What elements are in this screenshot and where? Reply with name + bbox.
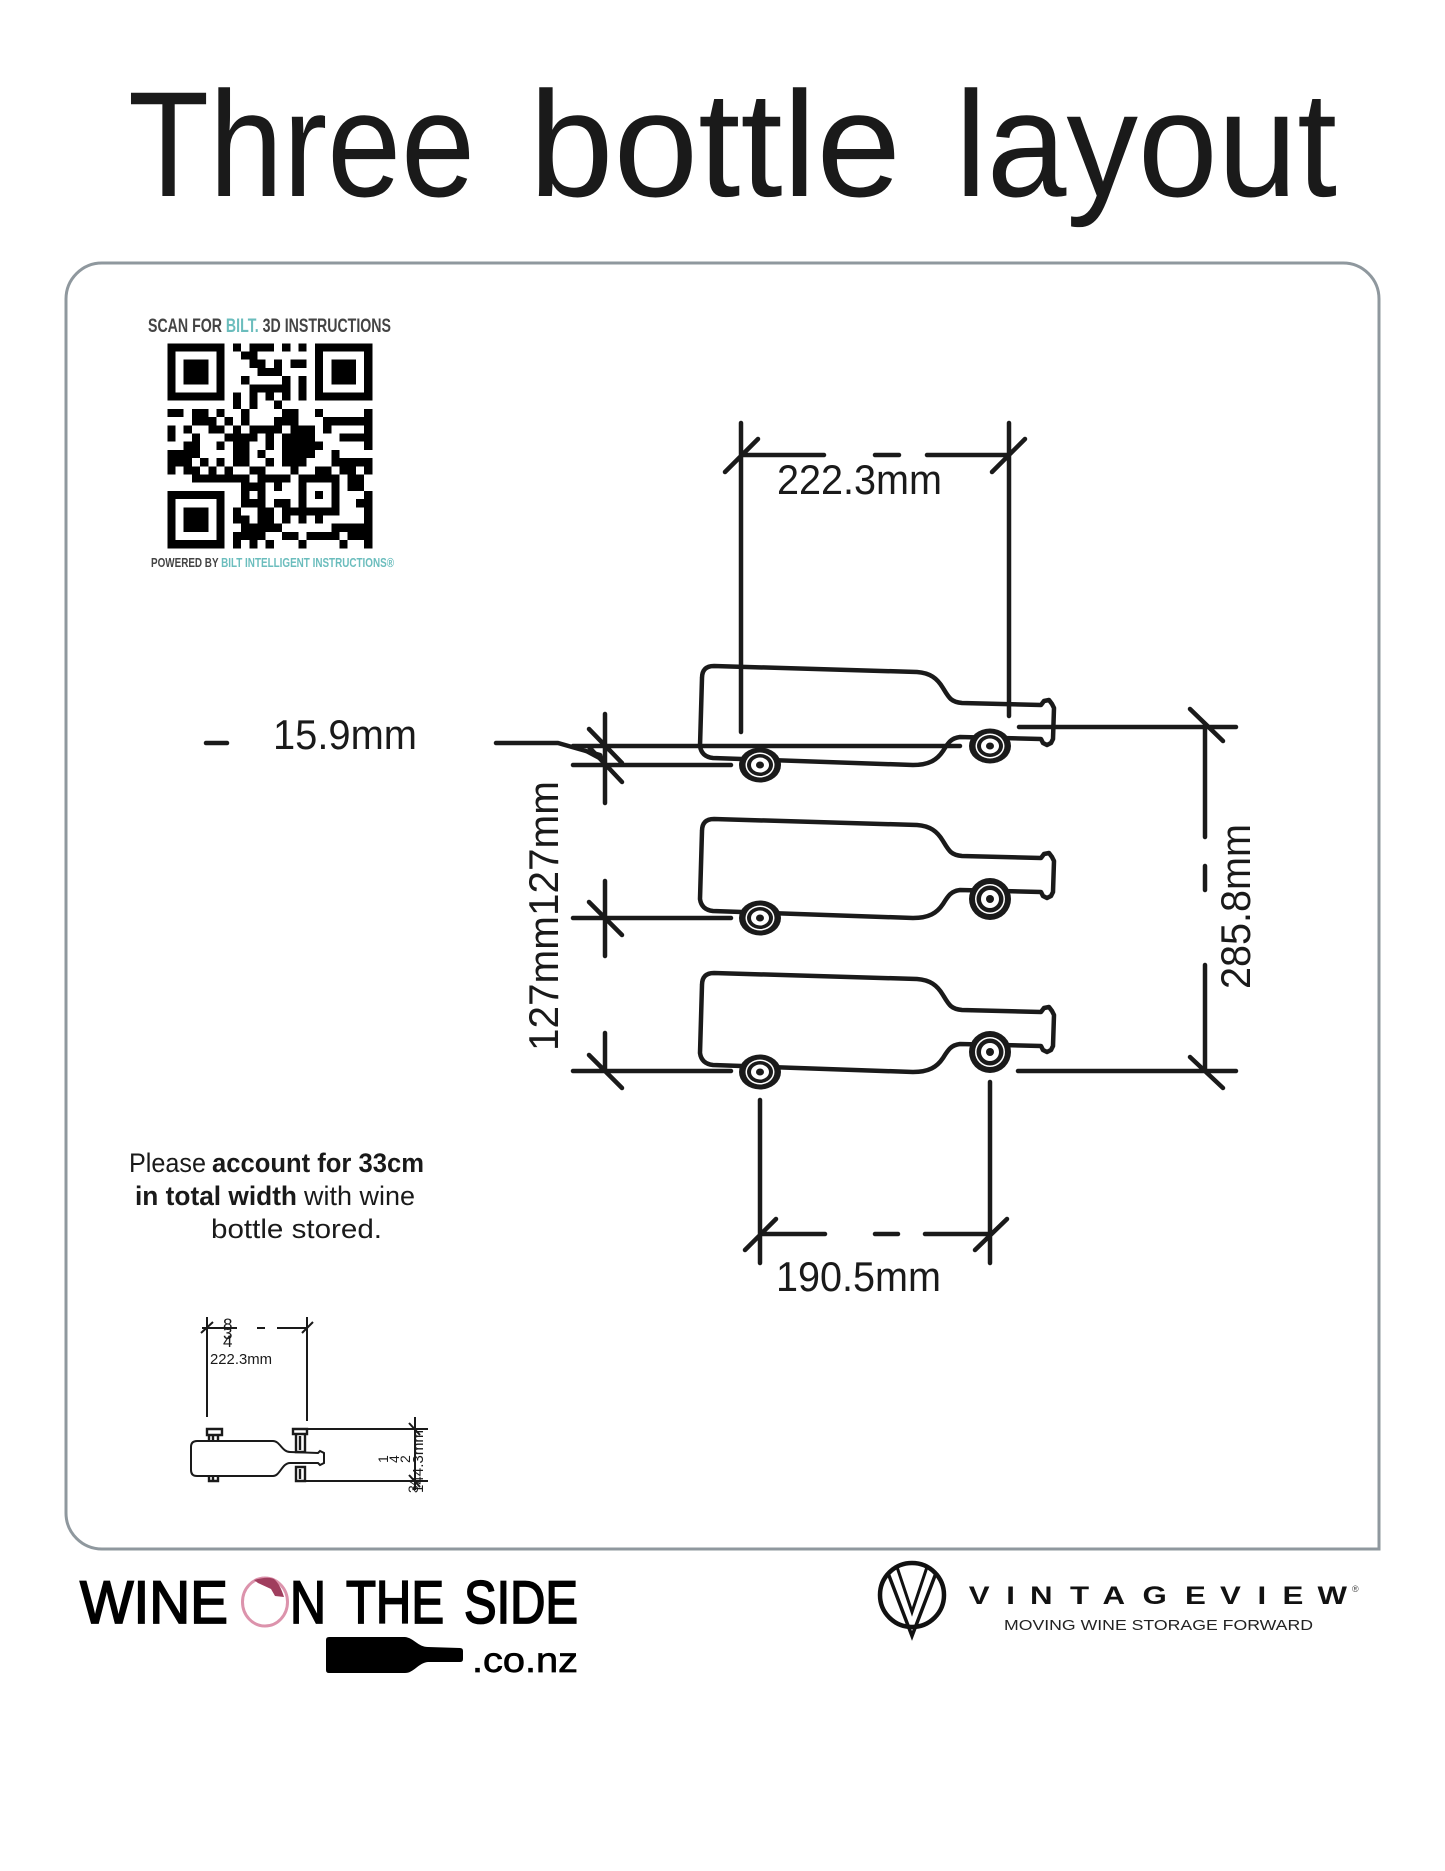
- logo wordmark: WINE: [80, 1569, 228, 1636]
- small side-view drawing: [191, 1315, 428, 1493]
- side-view labels: 144.3mm: [410, 1430, 427, 1493]
- logo wordmark: SIDE: [464, 1569, 578, 1636]
- QR heading: SCAN FOR BILT. 3D INSTRUCTIONS: [148, 316, 391, 337]
- title: bottle: [529, 60, 901, 228]
- side-view labels: 3: [405, 1485, 421, 1493]
- QR code block: [148, 316, 395, 570]
- side-view labels: [210, 1315, 427, 1493]
- wordmark: VINTAGEVIEW: [969, 1581, 1347, 1609]
- leader line: 15.9mm: [496, 743, 606, 764]
- tagline: MOVING WINE STORAGE FORWARD: [1004, 1618, 1313, 1634]
- note text: Please: [129, 1148, 206, 1178]
- emblem: [880, 1563, 944, 1636]
- logo domain: .co.nz: [472, 1641, 578, 1680]
- side-view hardware: [207, 1429, 307, 1481]
- panel frame: [66, 263, 1379, 1549]
- logo: Wine on the Side: [80, 1569, 578, 1680]
- QR matrix: [167, 343, 372, 548]
- wine stain ring: [242, 1578, 288, 1626]
- label: 15.9mm: 15.9mm: [273, 711, 417, 758]
- logo: Vintageview: [880, 1563, 1359, 1636]
- dimension: overall height: [1018, 709, 1236, 1088]
- note text: in total width: [135, 1181, 297, 1211]
- side-view labels: 3: [223, 1324, 232, 1343]
- logo wordmark: THE: [346, 1569, 444, 1636]
- label: 222.3mm: 222.3mm: [777, 456, 942, 503]
- label: 127mm127mm: 127mm127mm: [520, 781, 567, 1051]
- bottle 2: [700, 819, 1054, 918]
- washers: [739, 728, 1011, 1090]
- title: layout: [955, 60, 1337, 228]
- title: Three: [128, 60, 475, 228]
- note text: with wine: [303, 1181, 415, 1211]
- side-view labels: 1: [375, 1455, 391, 1463]
- registered mark: ®: [1352, 1584, 1359, 1594]
- bottle 3: [700, 973, 1054, 1072]
- note text: account for 33cm: [212, 1148, 424, 1178]
- dimension: top width: [725, 423, 1025, 732]
- logo wordmark: N: [290, 1569, 326, 1636]
- side-view lines: [201, 1317, 428, 1490]
- dimension: bottom width: [745, 1082, 1007, 1263]
- title: [128, 60, 1337, 228]
- side-view labels: 4: [223, 1332, 232, 1351]
- side-view bottle: [191, 1441, 324, 1476]
- side-view labels: 222.3mm: [210, 1351, 272, 1368]
- dash: 15.9mm: [206, 741, 227, 745]
- QR caption: POWERED BY BILT INTELLIGENT INSTRUCTIONS®: [151, 556, 395, 570]
- note text: bottle stored.: [211, 1214, 382, 1244]
- label: 285.8mm: 285.8mm: [1212, 824, 1259, 989]
- main dimension drawing: [206, 423, 1259, 1300]
- logo wordmark: [80, 1569, 578, 1636]
- side-view labels: 4: [386, 1455, 402, 1463]
- label: 190.5mm: 190.5mm: [776, 1253, 941, 1300]
- note text: [129, 1148, 424, 1244]
- side-view labels: 2: [397, 1455, 413, 1463]
- side-view labels: 8: [223, 1315, 232, 1334]
- wine stain blotch: [254, 1578, 284, 1597]
- dimension: left spacing: [573, 714, 960, 1088]
- logo bottle: [326, 1637, 463, 1673]
- side-view labels: 4: [405, 1478, 421, 1486]
- bottle 1: [700, 666, 1054, 765]
